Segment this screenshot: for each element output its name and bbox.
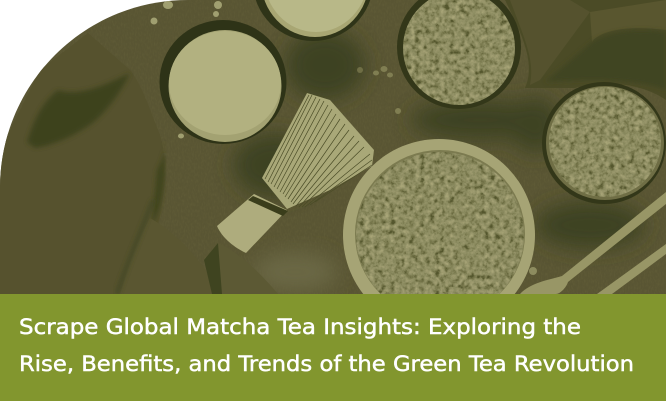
tea grains (150, 1, 537, 275)
cup: matcha latte (160, 20, 286, 144)
whisk handle (217, 194, 287, 253)
title band (0, 294, 666, 401)
wooden spoons (520, 192, 666, 294)
title line 1: Scrape Global Matcha Tea Insights: Exploring the (19, 315, 581, 339)
cloth: left napkin (0, 33, 165, 294)
cloth: bottom folds (117, 200, 278, 294)
table highlights (253, 252, 337, 292)
cup: top centre matcha latte (253, 0, 373, 41)
photo: matcha tea flat lay (0, 0, 666, 294)
title (19, 315, 634, 376)
cloth: upper right (505, 0, 666, 100)
bowl: large wooden bowl of powder (343, 139, 535, 294)
whisk tines (262, 93, 374, 209)
bowl: matcha powder top (397, 0, 521, 109)
bamboo whisk (217, 93, 374, 253)
bowl: matcha powder right (542, 82, 666, 204)
table shadows (233, 30, 645, 249)
title line 2: Rise, Benefits, and Trends of the Green Tea Revolution (19, 352, 634, 376)
wooden table background (0, 0, 666, 294)
